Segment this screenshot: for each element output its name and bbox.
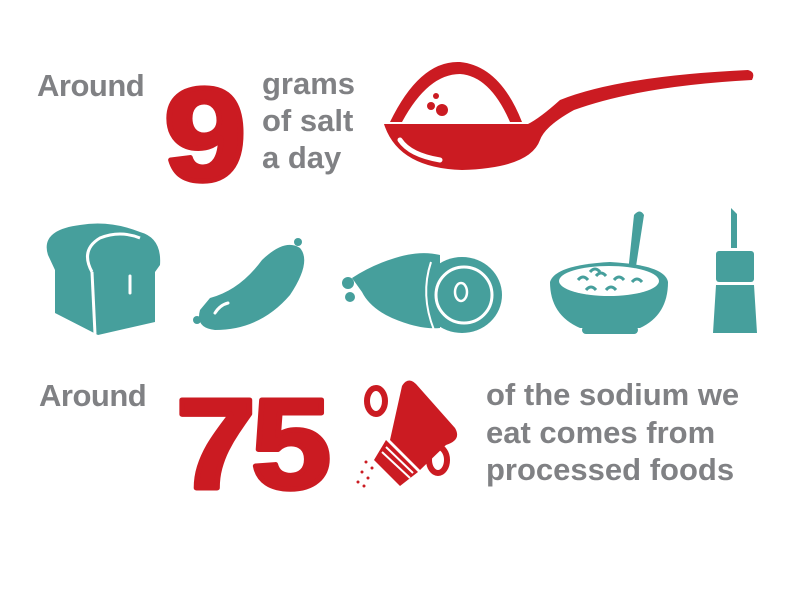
icon: sausage bbox=[193, 238, 304, 330]
text block: grams of salt a day: a day bbox=[262, 140, 342, 175]
big number 75: 75 bbox=[176, 372, 327, 515]
text block: of the sodium we eat comes from processed foods: of the sodium we bbox=[486, 377, 739, 412]
icon: bottle bbox=[713, 208, 757, 333]
icon: bread bbox=[47, 224, 160, 335]
icon: ham bbox=[342, 253, 502, 333]
text block: of the sodium we eat comes from processed foods: processed foods bbox=[486, 452, 734, 487]
text block: grams of salt a day: grams bbox=[262, 66, 355, 101]
text block: grams of salt a day: of salt bbox=[262, 103, 353, 138]
text block: of the sodium we eat comes from processed foods bbox=[486, 377, 739, 487]
text block: of the sodium we eat comes from processed foods: eat comes from bbox=[486, 415, 715, 450]
percent sign with salt shaker bbox=[356, 380, 457, 488]
big number 9: 9 bbox=[164, 60, 246, 208]
heading: Around (bottom): Around bbox=[39, 378, 146, 413]
icon: bowl bbox=[550, 212, 668, 334]
heading: Around (top): Around bbox=[37, 68, 144, 103]
icon: spoon with salt bbox=[384, 62, 753, 170]
text block: grams of salt a day bbox=[262, 66, 355, 175]
icon row: processed foods bbox=[47, 208, 757, 335]
